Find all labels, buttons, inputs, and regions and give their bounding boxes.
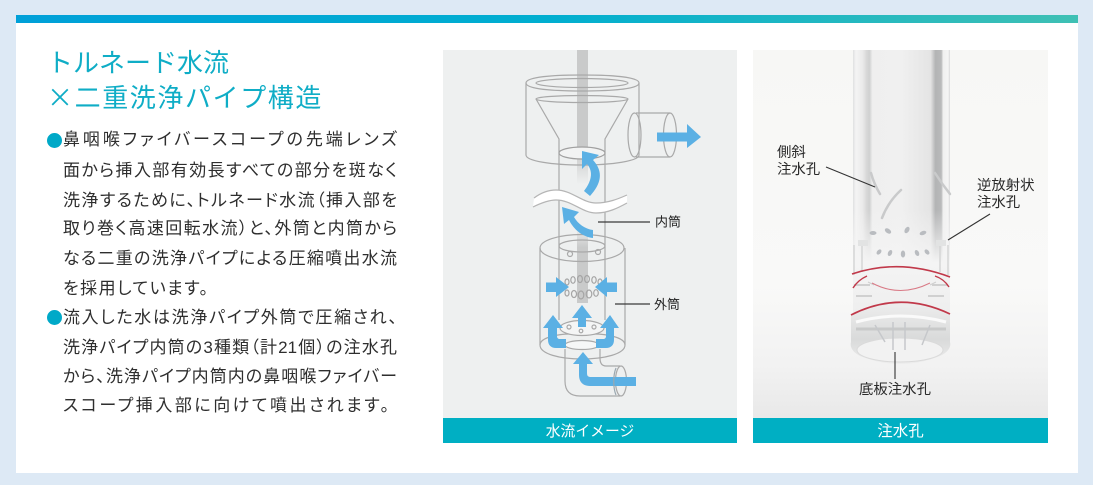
wave break bbox=[533, 190, 627, 213]
text block: description: から、洗浄パイプ内筒内の鼻咽喉ファイバー bbox=[63, 367, 397, 386]
text block: description: 流入した水は洗浄パイプ外筒で圧縮され、 bbox=[63, 308, 397, 327]
title: トルネード水流 bbox=[47, 48, 229, 78]
base plate bbox=[560, 320, 604, 350]
title: ×二重洗浄パイプ構造 bbox=[47, 78, 323, 115]
caption: water holes: 注水孔 bbox=[877, 423, 924, 440]
transparent pipe bbox=[853, 50, 950, 315]
bullet two bbox=[47, 310, 62, 325]
outlet pipe bbox=[628, 113, 676, 157]
panel: water flow diagram bbox=[443, 50, 737, 443]
label: side oblique holes: 側斜 bbox=[777, 144, 806, 161]
title bbox=[47, 48, 323, 115]
text block: description: なる二重の洗浄パイプによる圧縮噴出水流 bbox=[63, 249, 397, 268]
water holes bbox=[565, 276, 602, 299]
arrow: center up bbox=[572, 305, 592, 327]
panel: water holes photo bbox=[753, 50, 1048, 443]
label: outer tube bbox=[615, 297, 680, 312]
pipe over arrow detail bbox=[614, 368, 616, 395]
text block: description bbox=[47, 130, 397, 415]
arrow: lower swirl bbox=[562, 207, 593, 238]
text block: description: スコープ挿入部に向けて噴出されます。 bbox=[63, 396, 389, 415]
label: inner tube bbox=[598, 214, 681, 230]
arrow: compress right bbox=[595, 277, 617, 297]
label: outer tube: 外筒 bbox=[654, 297, 680, 312]
arrow: left up bbox=[543, 315, 566, 348]
top gradient bar bbox=[16, 15, 1078, 23]
label: bottom plate holes: 底板注水孔 bbox=[859, 381, 931, 398]
caption: water flow bbox=[443, 418, 737, 443]
text block: description: 洗浄するために、トルネード水流（挿入部を bbox=[63, 191, 397, 210]
arrow: outlet bbox=[657, 124, 701, 148]
arrow: inlet bbox=[573, 352, 636, 386]
blue arrows bbox=[543, 124, 701, 386]
inlet elbow pipe bbox=[565, 349, 626, 396]
arrow: right up bbox=[596, 315, 619, 348]
outer cylinder bbox=[540, 234, 625, 359]
text block: description: 鼻咽喉ファイバースコープの先端レンズ bbox=[63, 130, 397, 149]
label: reverse radial holes: 逆放射状 bbox=[977, 177, 1035, 194]
bullet one bbox=[47, 133, 62, 148]
text block: description: 取り巻く高速回転水流）と、外筒と内筒から bbox=[63, 219, 397, 238]
reverse radial holes bbox=[858, 226, 946, 258]
caption: water flow: 水流イメージ bbox=[546, 424, 634, 440]
label: side oblique holes bbox=[777, 144, 875, 187]
caption: water holes bbox=[753, 418, 1048, 443]
label: inner tube: 内筒 bbox=[655, 214, 681, 230]
upper housing bbox=[526, 75, 639, 320]
label: reverse radial holes bbox=[948, 177, 1035, 240]
pipe tip bbox=[851, 245, 950, 364]
text block: description: を採用しています。 bbox=[63, 279, 208, 298]
red rings bbox=[851, 267, 950, 315]
arrow: compress left bbox=[546, 277, 569, 297]
gray scope shaft bbox=[577, 50, 588, 303]
label: reverse radial holes: 注水孔 bbox=[977, 194, 1020, 211]
text block: description: 面から挿入部有効長すべての部分を斑なく bbox=[63, 161, 397, 180]
side oblique holes bbox=[871, 173, 950, 218]
text block: description: 洗浄パイプ内筒の3種類（計21個）の注水孔 bbox=[63, 338, 397, 357]
label: bottom plate holes bbox=[859, 352, 931, 398]
label: side oblique holes: 注水孔 bbox=[777, 161, 820, 178]
arrow: upper swirl bbox=[582, 151, 600, 196]
